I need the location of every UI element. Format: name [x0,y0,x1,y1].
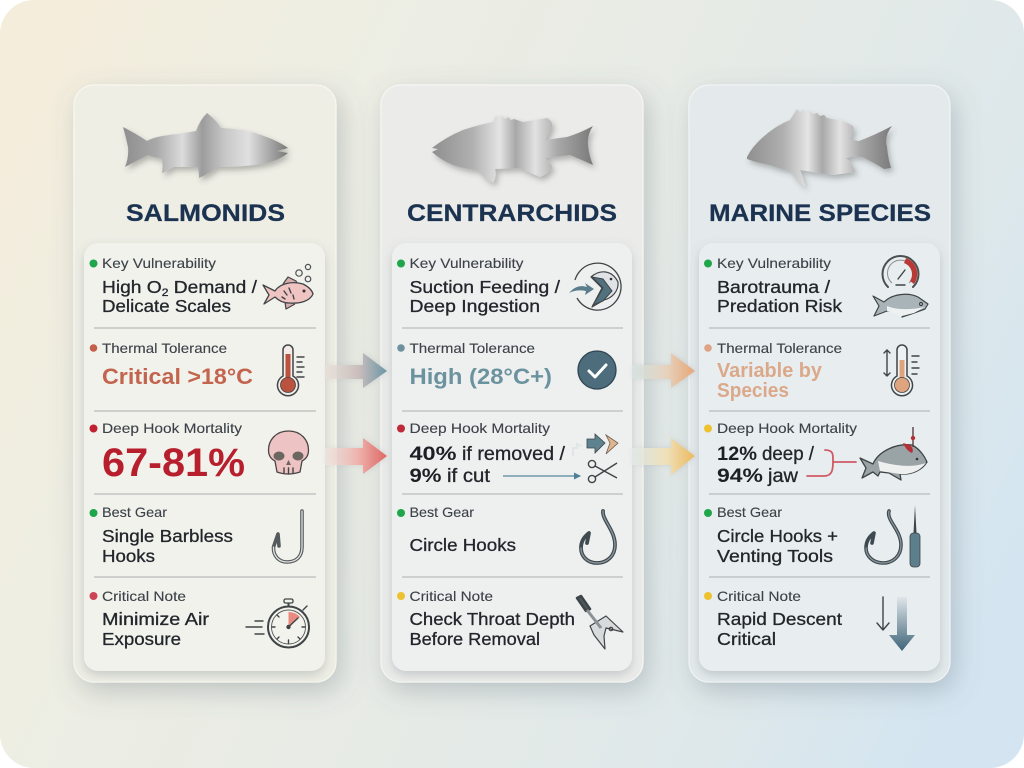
row: best gear: Best Gear [717,504,782,520]
row: key vulnerability: Demand / [168,277,257,297]
row: key vulnerability: Predation Risk [717,296,842,316]
row: deep hook mortality [90,420,245,485]
row: best gear: Hooks [102,546,155,566]
row: critical note [704,588,842,649]
row: key vulnerability: Suction Feeding / [410,277,560,297]
panel card: marine species [689,85,950,682]
row: key vulnerability: Key Vulnerability [102,255,216,271]
row: critical note: Minimize Air [102,609,209,629]
icon: hooked fish [860,427,927,480]
row: deep hook mortality: jaw [767,466,798,487]
row: best gear [704,504,838,566]
icon: skull [268,431,308,474]
row: best gear [90,504,233,566]
inner card: salmonids [84,243,325,671]
row: critical note: Critical [717,629,776,649]
row: critical note: Check Throat Depth [410,609,575,629]
heading: marine species: MARINE SPECIES [709,200,931,227]
row: thermal tolerance: Thermal Tolerance [102,340,227,356]
icon: red bracket [807,450,856,476]
row: deep hook mortality: 94% [717,466,763,487]
row: deep hook mortality: deep / [762,444,815,465]
inner card: marine species [699,243,940,671]
row: key vulnerability: Deep Ingestion [410,296,540,316]
row: key vulnerability: Barotrauma / [717,277,830,297]
row: thermal tolerance [90,340,253,389]
arrow: mortality salmonids to centrarchids [325,438,387,474]
row: critical note: Critical Note [717,588,801,604]
row: key vulnerability: High O [102,277,156,297]
row: thermal tolerance [397,340,552,389]
icon: pressure gauge and fish [873,256,928,317]
row: deep hook mortality: 9% [410,466,442,487]
icon: throat check tool [577,596,623,649]
row: deep hook mortality [397,420,566,487]
row: deep hook mortality: Deep Hook Mortality [102,420,242,436]
row: thermal tolerance: Variable by [717,360,823,382]
row: thermal tolerance: Species [717,380,789,402]
icon: fish mouth suction [569,263,621,310]
row: deep hook mortality: if cut [447,466,491,487]
row: deep hook mortality: 12% [717,444,757,465]
row: deep hook mortality: if removed / [462,444,566,465]
icon: arrows and scissors [503,434,618,483]
row: critical note: Exposure [102,629,181,649]
heading: salmonids: SALMONIDS [126,200,285,227]
row: best gear: Venting Tools [717,546,833,566]
row: best gear [397,504,516,555]
row: key vulnerability: Key Vulnerability [717,255,831,271]
heading: centrarchids: CENTRARCHIDS [407,200,617,227]
row: best gear: Circle Hooks [410,535,516,555]
icon: check badge [578,351,616,389]
panel: salmonids [74,85,336,682]
row: thermal tolerance: Critical >18°C [102,364,253,389]
icon: descent arrows [877,597,915,651]
panel card: salmonids [74,85,336,682]
row: deep hook mortality: 40% [410,444,457,465]
arrow: thermal salmonids to centrarchids [325,353,387,388]
row: critical note: Before Removal [410,629,540,649]
row: critical note [397,588,575,649]
icon: thermometer critical [278,345,304,396]
row: thermal tolerance: Thermal Tolerance [410,340,535,356]
arrow: thermal centrarchids to marine [632,353,695,388]
row: best gear: Best Gear [102,504,167,520]
row: critical note: Rapid Descent [717,609,842,629]
icon: bass silhouette [432,115,593,183]
row: best gear: Best Gear [410,504,474,520]
icon: stopwatch [246,599,309,648]
row: key vulnerability [90,255,257,316]
row: critical note: Critical Note [102,588,186,604]
row: key vulnerability [397,255,560,316]
row: critical note: Critical Note [410,588,493,604]
row: deep hook mortality: Deep Hook Mortality [717,420,857,436]
icon: salmon silhouette [123,113,288,178]
icon: single barbless hook [273,511,302,562]
row: best gear: Single Barbless [102,526,233,546]
row: thermal tolerance [704,340,842,402]
row: critical note [90,588,209,649]
row: thermal tolerance: High (28°C+) [410,364,552,389]
inner card: centrarchids [392,243,632,671]
icon: circle hook [581,511,615,563]
row: deep hook mortality [704,420,857,487]
icon: snapper silhouette [747,109,892,187]
panel: centrarchids [381,85,643,682]
row: key vulnerability [704,255,842,316]
icon: thermometer variable [884,345,919,396]
row: key vulnerability: Delicate Scales [102,296,231,316]
arrow: mortality centrarchids to marine [632,438,695,475]
icon: circle hook and venting tool [866,505,920,567]
row: deep hook mortality: 67-81% [102,441,245,485]
panel: marine species [689,85,950,682]
row: key vulnerability: Key Vulnerability [410,255,524,271]
row: best gear: Circle Hooks + [717,526,838,546]
row: thermal tolerance: Thermal Tolerance [717,340,842,356]
icon: fish with bubbles [263,264,313,309]
panel card: centrarchids [381,85,643,682]
row: key vulnerability: 2 [162,287,168,299]
row: deep hook mortality: Deep Hook Mortality [410,420,550,436]
